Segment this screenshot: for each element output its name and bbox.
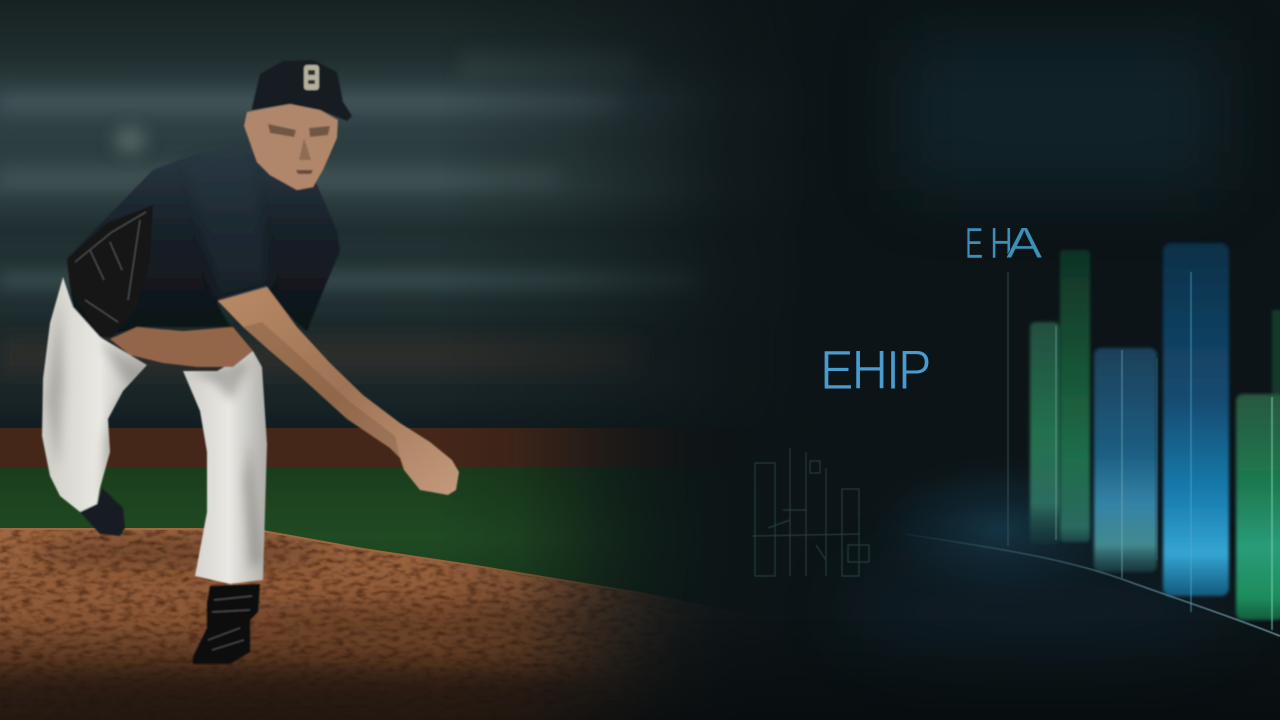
bar chart [1008, 243, 1280, 630]
infield dirt track [0, 428, 820, 468]
sleeve highlight [186, 144, 270, 298]
jersey [67, 142, 340, 337]
bar: mid blue [1094, 348, 1157, 572]
front leg [183, 351, 267, 584]
throwing arm [218, 287, 459, 495]
floor line [905, 534, 1280, 636]
face [244, 104, 338, 190]
small faint line chart [752, 448, 869, 576]
dark fade to the right [440, 0, 1280, 720]
bar: right green [1236, 394, 1280, 620]
sleeve edge [218, 287, 267, 301]
bar highlight lines [1008, 272, 1272, 630]
back leg [42, 277, 147, 512]
label: EHA: E [965, 218, 983, 268]
bar: short green [1030, 322, 1060, 544]
pitcher's mound [0, 528, 694, 720]
pitcher [42, 60, 459, 664]
cap [252, 60, 352, 121]
bottom vignette [0, 620, 1280, 720]
front shoe [193, 584, 260, 664]
glove [67, 205, 153, 337]
label: EHA [965, 218, 1042, 268]
bar: far-right dark green [1272, 310, 1280, 400]
floor glow [840, 450, 1240, 660]
outfield grass [0, 468, 820, 608]
bar: tall dark green [1060, 250, 1090, 542]
label: EHA: H [990, 219, 1013, 268]
label: EHA: A [1006, 218, 1042, 268]
back shoe [80, 488, 125, 536]
bar: tall blue [1163, 243, 1229, 596]
label: EHIP: EHIP [820, 340, 932, 402]
bent forearm [110, 327, 253, 367]
